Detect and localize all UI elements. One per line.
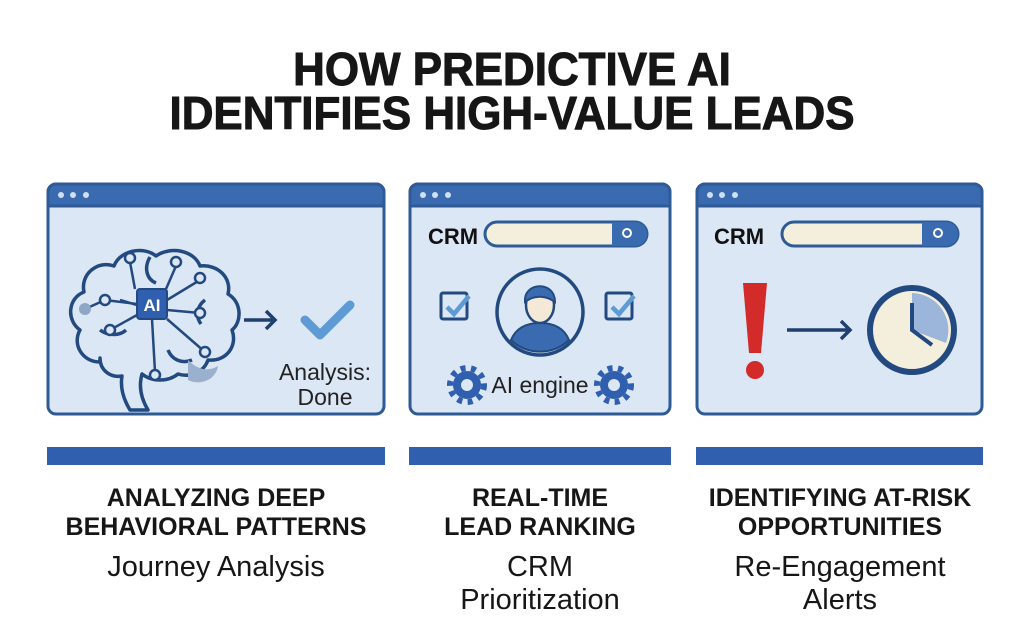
title: IDENTIFIES HIGH-VALUE LEADS [169,87,855,139]
caption 2: Prioritization [460,584,620,616]
caption 2: CRM [507,551,573,583]
icon: person [497,269,583,355]
caption 1: BEHAVIORAL PATTERNS [66,513,366,541]
panel: journey analysis window [48,184,384,414]
icon: check [305,305,350,335]
panel illustrations [46,182,984,416]
caption 1: ANALYZING DEEP [107,484,325,512]
panel: journey analysis window: Done [298,384,352,410]
panel: re-engagement window [697,184,982,414]
icon: AI brain: AI [144,296,160,315]
panel: re-engagement window: CRM [714,224,764,249]
arrow [787,321,850,339]
AI engine label with gears [453,371,628,399]
text: analysis done: Analysis: [279,359,371,385]
icon: exclamation [743,283,767,353]
icon: AI brain [71,251,239,410]
caption 3: Re-Engagement [734,551,946,583]
caption 3: IDENTIFYING AT-RISK [709,484,971,512]
panel: CRM ranking window: CRM [428,224,478,249]
caption 1: Journey Analysis [107,551,325,583]
caption 2: REAL-TIME [472,484,608,512]
caption 2: LEAD RANKING [444,513,636,541]
caption 3: Alerts [803,584,877,616]
bars [47,447,385,465]
title [169,43,855,139]
icons: checkboxes [441,293,467,319]
caption 3: OPPORTUNITIES [738,513,942,541]
caption 3 [709,484,971,616]
caption 2 [444,484,636,616]
panel: CRM ranking window: AI engine [491,372,589,398]
caption 1 [66,484,366,583]
arrow [244,311,275,329]
panel: CRM ranking window [410,184,670,414]
title: HOW PREDICTIVE AI [293,43,731,95]
icon: clock [870,288,954,372]
